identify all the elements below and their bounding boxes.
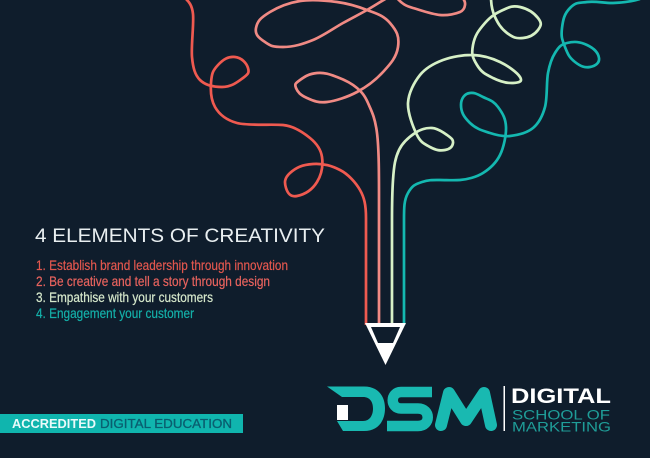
logo divider bbox=[504, 386, 505, 431]
logo letter S bbox=[387, 392, 432, 426]
pink looping line bbox=[256, 0, 465, 325]
red looping line bbox=[185, 0, 366, 325]
banner text: accredited: ACCREDITED bbox=[12, 417, 96, 431]
pencil tip bbox=[365, 323, 406, 365]
banner: accredited digital education bbox=[0, 414, 243, 433]
illustration: pencil with four looping lines bbox=[185, 0, 640, 365]
logo: DSM Digital School of Marketing bbox=[327, 385, 611, 434]
title: 4 ELEMENTS OF CREATIVITY bbox=[35, 225, 325, 247]
banner text: digital education: DIGITAL EDUCATION bbox=[100, 417, 232, 431]
teal looping line bbox=[404, 0, 640, 325]
logo text: marketing: MARKETING bbox=[512, 418, 611, 434]
list item 1: 1. Establish brand leadership through innovation bbox=[36, 257, 288, 273]
list item 2: 2. Be creative and tell a story through design bbox=[36, 273, 270, 289]
list item 4: 4. Engagement your customer bbox=[36, 305, 194, 321]
logo text: school of: SCHOOL OF bbox=[512, 406, 610, 422]
list item 3: 3. Empathise with your customers bbox=[36, 289, 213, 305]
list: four elements bbox=[36, 257, 288, 321]
logo text: digital: DIGITAL bbox=[511, 385, 611, 408]
logo white square bbox=[337, 405, 348, 420]
logo letter M bbox=[441, 393, 491, 425]
pale green looping line bbox=[392, 0, 541, 325]
logo letter D bbox=[327, 386, 385, 431]
